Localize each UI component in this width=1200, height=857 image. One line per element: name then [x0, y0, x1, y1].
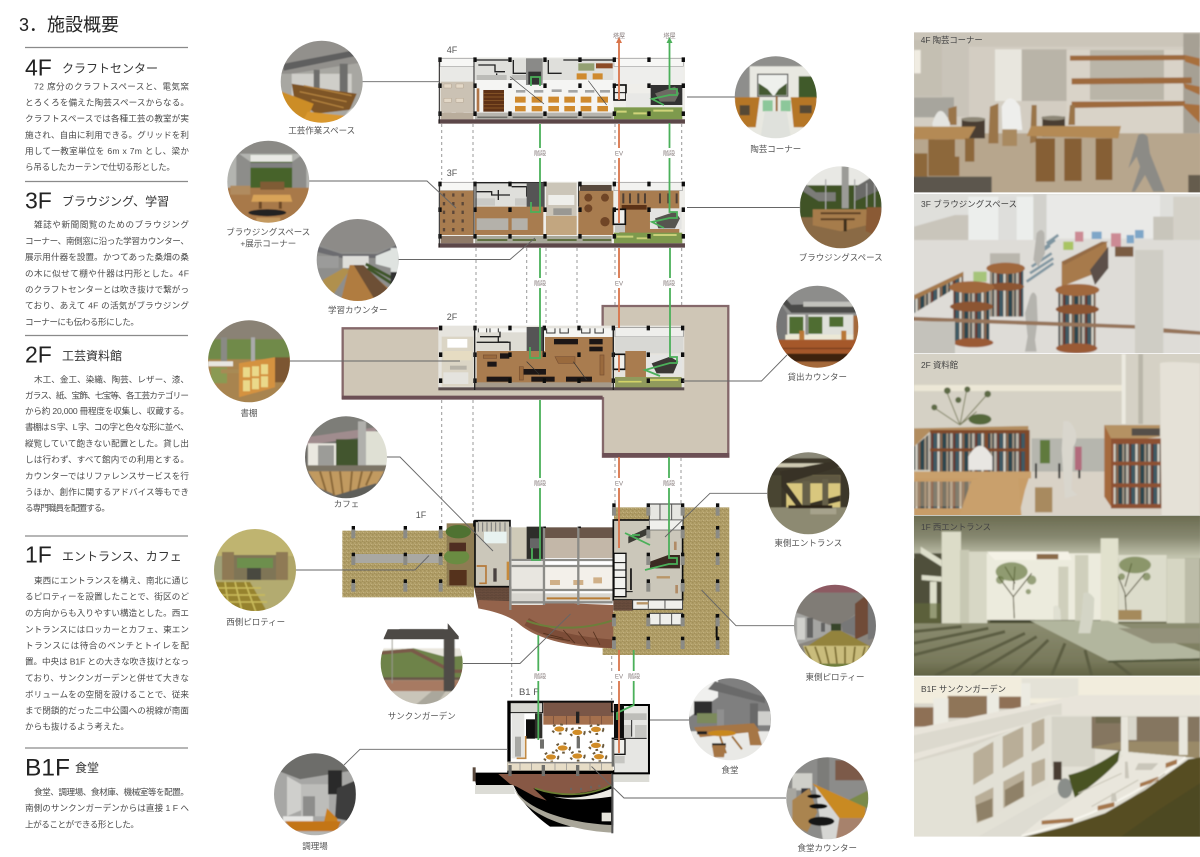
section: 3F browsing and study: 展示用什器を設置。かつてあった桑畑の桑 — [25, 251, 189, 262]
caption: study counter: 学習カウンター — [328, 305, 387, 315]
section: 1F entrance and cafe: ントランスにはロッカーとカフェ、東エン — [25, 624, 189, 634]
caption: east piloti: 東側ピロティー — [806, 672, 864, 682]
floor plan: 1F with sunken garden: 1F — [416, 510, 427, 520]
section: B1F dining: 食堂、調理場、食材庫、機械室等を配置。 — [34, 786, 189, 797]
section: B1F dining: B1F — [25, 754, 70, 782]
section: 1F entrance and cafe: ており、サンクンガーデンと併せて大きな — [25, 672, 189, 683]
section: 3F browsing and study: の木に似せて棚や什器は円形とした。4F — [25, 268, 189, 278]
section: 3F browsing and study: ており、あえて 4F の活気がブラウジング — [25, 300, 189, 310]
caption: pottery corner: 陶芸コーナー — [750, 144, 801, 154]
caption: browsing and exhibit corner: ブラウジングスペース — [226, 227, 310, 237]
section: 2F craft archive: 木工、金工、染織、陶芸、レザー、漆、 — [34, 374, 189, 384]
photo circle: pottery corner — [734, 56, 817, 138]
caption: cafe: カフェ — [334, 499, 359, 509]
photo label: 2F 資料館 — [921, 360, 958, 370]
panel: model photo 3F browsing space — [908, 190, 1200, 357]
vertical line labels: 階段 — [534, 280, 546, 288]
section: 2F craft archive — [25, 342, 189, 513]
section: B1F dining — [25, 754, 189, 830]
section: B1F dining: 上がることができる形とした。 — [25, 818, 139, 830]
vertical line labels: 階段 — [534, 150, 546, 158]
section: 1F entrance and cafe: の方向からも入りやすい構造とした。西エ — [25, 607, 189, 618]
vertical line labels: 階段 — [663, 480, 675, 488]
floor plan: 4F: 4F — [447, 45, 458, 55]
photo circle: kitchen — [274, 753, 356, 836]
section: 1F entrance and cafe: まで閉鎖的だった二中公園への視線が南面 — [25, 704, 189, 716]
section: 3F browsing and study: のクラフトセンターとは吹き抜けで繋がっ — [25, 284, 189, 294]
section: 1F entrance and cafe — [25, 542, 189, 732]
section: 3F browsing and study: コーナーにも伝わる形にした。 — [25, 317, 139, 327]
section: 2F craft archive: から約 20,000 冊程度を収集し、収蔵する。 — [25, 405, 189, 416]
photo circle: dining counter — [786, 757, 868, 840]
photo circle: sunken garden — [380, 623, 463, 704]
caption: browsing and exhibit corner — [226, 227, 310, 248]
photo circle: bookshelf — [208, 320, 290, 402]
caption: browsing space: ブラウジングスペース — [799, 252, 883, 262]
photo circle: craft work space — [280, 40, 363, 123]
vertical line labels: 階段 — [663, 280, 675, 288]
section: 2F craft archive: うほか、創作に関するアドバイス等もでき — [25, 486, 189, 497]
section: 2F craft archive: カウンターではリファレンスサービスを行 — [25, 470, 189, 481]
vertical line labels: 階段 — [628, 672, 640, 680]
section: 1F entrance and cafe: トランスには待合のベンチとトイレを配 — [25, 640, 189, 650]
caption: sunken garden: サンクンガーデン — [388, 711, 456, 721]
section: 4F craft center: クラフトスペースでは各種工芸の教室が実 — [25, 112, 189, 124]
vertical line labels: 階段 — [534, 672, 546, 680]
panel: model photo B1F sunken garden — [908, 673, 1200, 843]
section: 2F craft archive: ガラス、紙、宝飾、七宝等、各工芸カテゴリー — [25, 390, 189, 400]
stair and elevator connection lines — [530, 37, 677, 753]
vertical line labels: 塔屋 — [663, 32, 676, 40]
vertical line labels — [532, 32, 677, 681]
section: 1F entrance and cafe: 東西にエントランスを構え、南北に通じ — [34, 574, 189, 586]
photo circle: west piloti — [214, 529, 296, 611]
photo label: 3F ブラウジングスペース — [921, 199, 1017, 209]
floor plan: 2F with roof slab: 2F — [447, 312, 458, 322]
section: 1F entrance and cafe: 置。中央は B1F との大きな吹き抜けとなっ — [25, 656, 189, 666]
floor plan: B1F dining — [473, 687, 649, 833]
vertical line labels: EV — [615, 280, 624, 288]
section: 2F craft archive: 書棚は S 字、L 字、コの字と色々な形に並べ、 — [25, 421, 189, 432]
photo circle: east entrance — [767, 452, 850, 534]
section: 4F craft center: ら吊るしたカーテンで仕切る形とした。 — [25, 161, 175, 172]
caption: dining room: 食堂 — [721, 765, 739, 775]
panel: facility description text column — [19, 15, 189, 830]
section: 3F browsing and study: 3F — [25, 188, 52, 214]
section: 1F entrance and cafe: 1F — [25, 542, 52, 568]
photo circle: dining room — [689, 678, 771, 760]
vertical line labels: 階段 — [534, 480, 546, 488]
section: 2F craft archive: しは行わず、すべて館内での利用とする。 — [25, 454, 189, 464]
caption: dining counter: 食堂カウンター — [798, 843, 857, 853]
section: B1F dining: 食堂 — [75, 761, 99, 775]
caption: bookshelf: 書棚 — [240, 408, 258, 418]
photo circle: east piloti — [794, 584, 876, 667]
photo label: B1F サンクンガーデン — [921, 684, 1006, 694]
title: 3．施設概要 — [19, 15, 119, 35]
vertical line labels: EV — [615, 150, 624, 158]
vertical line labels: 階段 — [663, 150, 675, 158]
section: 3F browsing and study: コーナー、南側窓に沿った学習カウンター、 — [25, 235, 189, 246]
section: 2F craft archive: る専門職員を配置する。 — [25, 502, 110, 513]
section: 2F craft archive: 縦覧していて飽きない配置とした。貸し出 — [25, 438, 189, 448]
panel: model photo 4F pottery corner — [908, 27, 1200, 197]
section: 1F entrance and cafe: エントランス、カフェ — [62, 550, 182, 564]
section: 4F craft center — [25, 54, 189, 172]
section: 4F craft center: 用して一教室単位を 6m x 7m とし、梁か — [25, 145, 189, 156]
section: 4F craft center: クラフトセンター — [62, 62, 158, 76]
photo circle: cafe — [305, 416, 387, 498]
photo circle: study counter — [316, 219, 399, 301]
floor plan: 1F with sunken garden — [342, 503, 729, 655]
caption: lending counter: 貸出カウンター — [788, 372, 847, 382]
photo label: 4F 陶芸コーナー — [921, 35, 983, 45]
photo label: 1F 西エントランス — [921, 522, 991, 532]
caption: craft work space: 工芸作業スペース — [288, 126, 355, 136]
floor plan: 2F with roof slab — [342, 306, 729, 457]
floor plan: B1F dining: B1 F — [519, 687, 539, 698]
panel: model photo 2F library — [908, 350, 1200, 520]
caption: west piloti: 西側ピロティー — [226, 617, 285, 627]
floor plan: 4F — [438, 45, 685, 124]
section: 4F craft center: 72 席分のクラフトスペースと、電気窯 — [34, 80, 189, 92]
floor plan: 3F — [438, 168, 685, 248]
section: 2F craft archive: 2F — [25, 342, 52, 368]
section: 3F browsing and study: 雑誌や新聞閲覧のためのブラウジング — [34, 218, 189, 230]
vertical line labels: EV — [615, 480, 624, 488]
caption: kitchen: 調理場 — [302, 841, 328, 851]
section: 2F craft archive: 工芸資料館 — [62, 349, 122, 363]
photo circle: lending counter — [776, 286, 858, 368]
leader lines from photos to plans — [290, 82, 800, 798]
panel: model photo 1F west entrance — [908, 512, 1200, 678]
section: 4F craft center: 4F — [25, 54, 52, 80]
dashed alignment lines between floors — [442, 124, 682, 700]
vertical line labels: 塔屋 — [613, 32, 625, 40]
section: 4F craft center: とろくろを備えた陶芸スペースからなる。 — [25, 96, 189, 108]
section: 1F entrance and cafe: るピロティーを設置したことで、街区のど — [25, 590, 189, 602]
section: 4F craft center: 施され、自由に利用できる。グリッドを利 — [25, 129, 189, 140]
section: B1F dining: 南側のサンクンガーデンからは直接 1 F へ — [25, 802, 189, 813]
section: 1F entrance and cafe: ボリュームをの空間を設けることで、従来 — [25, 688, 189, 700]
floor plan: 3F: 3F — [447, 168, 458, 178]
section: 3F browsing and study — [25, 188, 189, 327]
section: 3F browsing and study: ブラウジング、学習 — [62, 194, 169, 208]
vertical line labels: EV — [615, 674, 624, 680]
section: 1F entrance and cafe: からも抜けるよう考えた。 — [25, 720, 129, 732]
photo circle: browsing and exhibit corner — [227, 140, 310, 223]
caption: east entrance: 東側エントランス — [774, 538, 842, 548]
photo circle: browsing space — [800, 166, 882, 248]
caption: browsing and exhibit corner: +展示コーナー — [240, 238, 296, 248]
